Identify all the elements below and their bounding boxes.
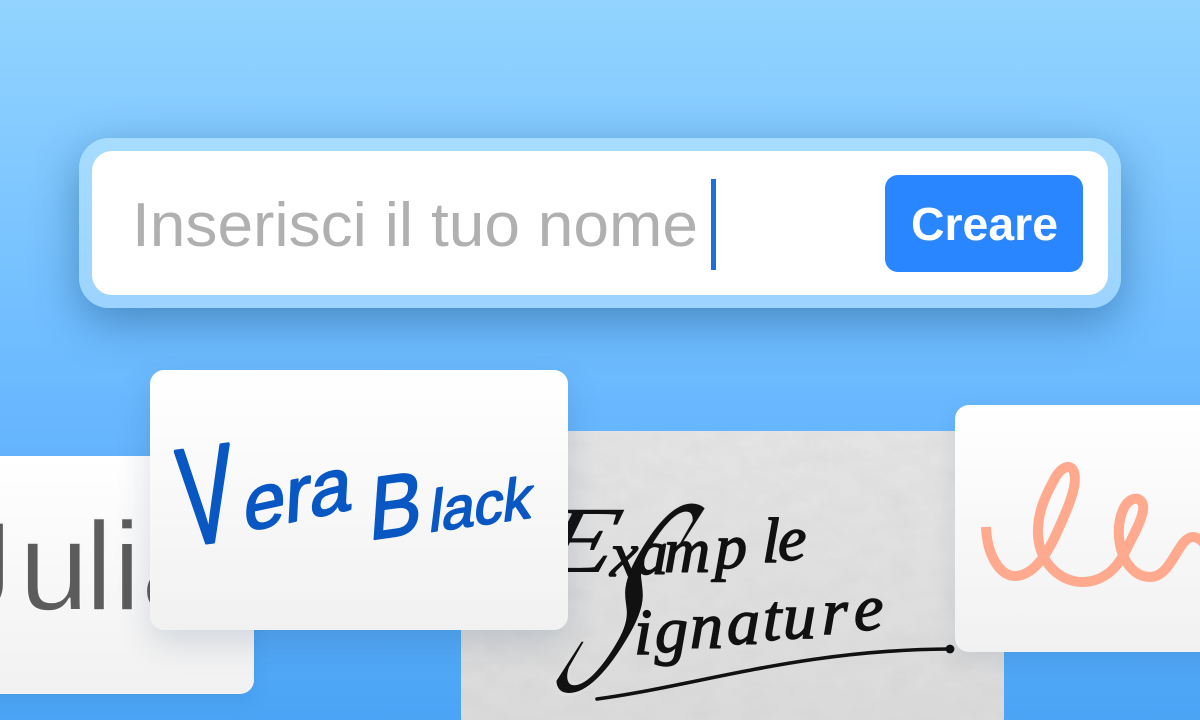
handwritten word: Signature: ignature (634, 572, 883, 669)
button label: Creare (911, 198, 1058, 250)
handwritten word: Signature (512, 437, 883, 720)
card: typed signature Julia (0, 456, 254, 694)
handwritten word: Example (527, 488, 806, 593)
signature text: Vera: V (172, 415, 240, 575)
signature text: Black: B (367, 451, 426, 559)
handwritten word: Example: E (527, 488, 632, 593)
signature text: Black: lack (426, 464, 537, 545)
coral signature squiggle (981, 462, 1200, 587)
placeholder text: Inserisci il tuo nome (132, 191, 698, 260)
signature underline flourish (597, 645, 954, 699)
signature text: Vera (172, 415, 355, 575)
signature text: Black (367, 451, 537, 559)
handwritten word: Example: xample (609, 503, 806, 590)
paper texture (461, 431, 1004, 720)
create button (885, 175, 1083, 272)
input bar (79, 138, 1121, 308)
signature text: Vera: era (242, 439, 355, 549)
card: handwritten signature Vera Black (150, 370, 568, 630)
input field (92, 151, 1108, 295)
card: drawn squiggle signature (955, 405, 1200, 652)
text caret (711, 179, 716, 270)
card: scanned paper signature (461, 431, 1004, 720)
